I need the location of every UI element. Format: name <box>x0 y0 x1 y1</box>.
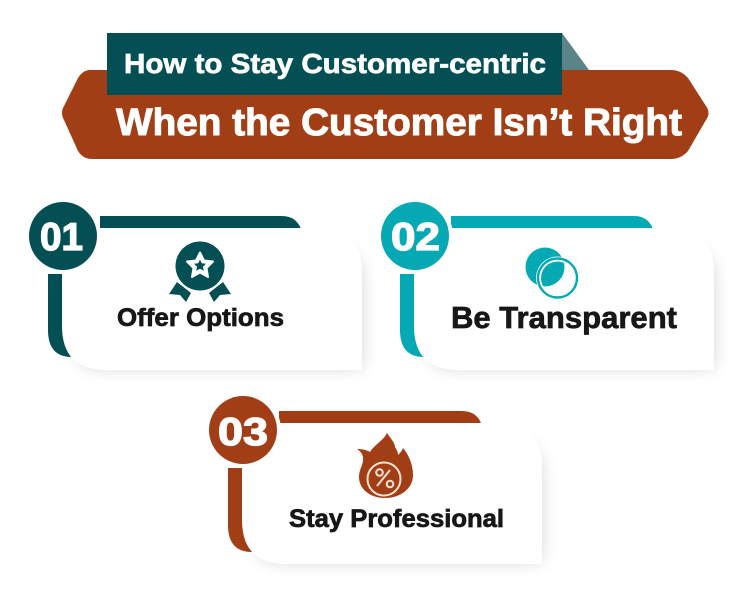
card 3: stay professional <box>205 392 542 564</box>
card 2 accent frame <box>400 216 653 357</box>
title banner <box>62 33 708 159</box>
card 2 number badge: 02 <box>391 216 440 259</box>
icon: award medal <box>169 242 231 302</box>
card 3 number badge <box>205 392 281 468</box>
card 2 panel <box>414 228 714 370</box>
card 2 shadow <box>427 245 714 368</box>
icon: flame with percent <box>357 433 413 498</box>
title upper band <box>107 33 562 95</box>
card 2 label: Be Transparent <box>451 300 677 335</box>
card 1 shadow <box>75 245 362 368</box>
card 2: be transparent <box>377 198 714 370</box>
card 3 label: Stay Professional <box>289 505 504 533</box>
card 1 panel <box>62 228 362 370</box>
card 3 number badge: 03 <box>218 411 268 454</box>
card 2 number badge <box>377 198 453 274</box>
title fold <box>562 33 589 70</box>
card 3 accent frame <box>228 411 481 552</box>
card 1 label: Offer Options <box>117 304 284 332</box>
card 3 panel <box>242 423 542 564</box>
title lower band <box>62 70 708 159</box>
icon: overlapping circles <box>526 248 579 300</box>
card 1: offer options <box>25 198 362 370</box>
title line 2: When the Customer Isn’t Right <box>116 102 682 144</box>
card 1 number badge: 01 <box>40 216 83 259</box>
card 1 number badge <box>25 198 101 274</box>
title line 1: How to Stay Customer-centric <box>124 48 546 79</box>
card 3 shadow <box>255 440 542 562</box>
card 1 accent frame <box>48 216 301 357</box>
